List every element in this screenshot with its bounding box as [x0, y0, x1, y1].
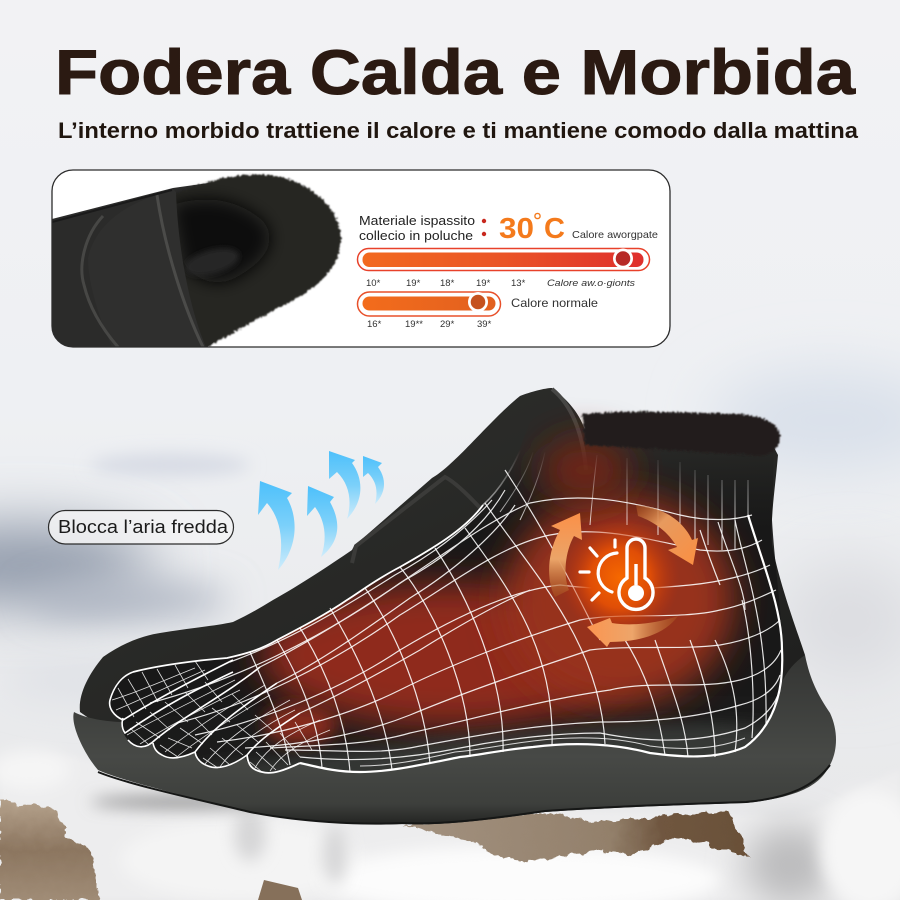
scale labels: upper bar: 10* [366, 278, 381, 289]
arrow: left [549, 513, 582, 597]
scale labels: lower bar: 29* [440, 319, 455, 330]
scale labels: lower bar: 16* [367, 319, 382, 330]
label: normal: Calore normale [511, 296, 598, 310]
fur collar [582, 412, 780, 456]
snow ground [0, 750, 900, 900]
temperature value: 30 [499, 213, 534, 245]
foot wireframe [110, 443, 782, 773]
scale labels: upper bar: 13* [511, 278, 526, 289]
cross mesh lines [250, 470, 766, 772]
scale labels: upper bar: Calore aw.o·gionts [547, 278, 635, 289]
pill label: blocks cold air: Blocca l’aria fredda [58, 517, 229, 537]
bar: normal heat level [358, 292, 500, 316]
legend text: material: collecio in poluche [359, 228, 473, 243]
temperature value: C [544, 213, 565, 245]
icon: thermometer [619, 539, 653, 609]
long mesh lines [150, 490, 781, 760]
legend text: material: Materiale ispassito [359, 213, 475, 228]
icon: cold air arrows [258, 451, 384, 570]
temperature value [499, 213, 565, 245]
collar seam [552, 389, 586, 470]
shoe with heat cutaway [73, 388, 836, 824]
rock: small [258, 880, 302, 900]
panel: lining detail and temperature [52, 170, 670, 347]
title: Fodera Calda e Morbida [55, 38, 856, 108]
scale labels: lower bar [367, 319, 492, 330]
arrow: right [636, 505, 698, 565]
scale labels: upper bar: 19* [406, 278, 421, 289]
scale labels: upper bar: 18* [440, 278, 455, 289]
photo: slipper fleece lining [52, 174, 341, 347]
fading ankle lines [483, 443, 748, 550]
foot outline [133, 505, 483, 672]
scale labels: lower bar: 39* [477, 319, 492, 330]
rock: centre [402, 812, 749, 861]
scale labels: upper bar [366, 278, 635, 289]
arrow: bottom [587, 616, 678, 647]
legend text: material [359, 213, 475, 243]
strap edge [352, 477, 482, 563]
icon: sun [580, 540, 617, 600]
shoe upper [80, 388, 805, 740]
icon: warming heat circulation [549, 505, 698, 647]
sole [73, 655, 836, 824]
scale labels: lower bar: 19** [405, 319, 423, 330]
bar: upper heat level [358, 248, 650, 270]
scale labels: upper bar: 19* [476, 278, 491, 289]
rock: left [0, 800, 100, 900]
toes [110, 660, 330, 773]
subtitle: L’interno morbido trattiene il calore e ti mantiene comodo dalla mattina [58, 118, 859, 143]
pill label: blocks cold air [48, 510, 234, 544]
bullets [482, 219, 486, 236]
label: warm mode: Calore aworgpate [572, 229, 658, 241]
heat glow inside foot [110, 409, 781, 772]
